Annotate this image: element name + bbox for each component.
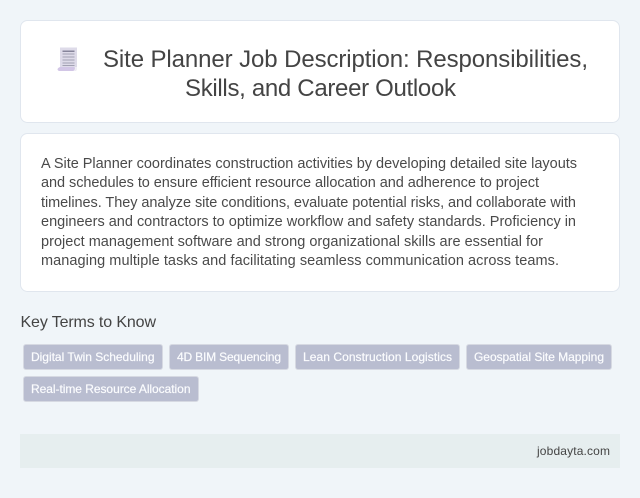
heading: key terms: Key Terms to Know: [20, 314, 156, 331]
tag: 4d bim sequencing: [170, 344, 288, 370]
description text: A Site Planner coordinates construction activities by developing detailed site layouts: [41, 156, 577, 172]
footer: [20, 434, 620, 468]
tag: real-time resource allocation: [24, 376, 198, 402]
description text: and schedules to ensure efficient resource allocation and adherence to project: [41, 175, 539, 191]
icon: document scroll: [58, 48, 77, 71]
title: Skills, and Career Outlook: [185, 75, 457, 102]
footer source: jobdayta.com: [536, 444, 610, 458]
description text: managing multiple tasks and facilitating seamless communication across teams.: [41, 253, 559, 269]
tag: 4d bim sequencing: 4D BIM Sequencing: [177, 350, 281, 364]
tag: lean construction logistics: Lean Construction Logistics: [303, 350, 452, 364]
tag: digital twin scheduling: [24, 344, 162, 370]
title: Site Planner Job Description: Responsibilities,: [103, 46, 588, 73]
tag: digital twin scheduling: Digital Twin Scheduling: [31, 350, 154, 364]
panel: description: [20, 134, 620, 292]
tag: lean construction logistics: [296, 344, 460, 370]
tag: geospatial site mapping: Geospatial Site Mapping: [474, 350, 604, 364]
description text: timelines. They analyze site conditions, evaluate potential risks, and collaborate with: [41, 195, 576, 211]
tag: geospatial site mapping: [466, 344, 612, 370]
tag: real-time resource allocation: Real-time Resource Allocation: [31, 382, 190, 396]
panel: title card: [20, 20, 620, 122]
description text: engineers and contractors to optimize workflow and safety standards. Proficiency in: [41, 214, 576, 230]
description text: project management software and strong organizational skills are essential for: [41, 234, 543, 250]
